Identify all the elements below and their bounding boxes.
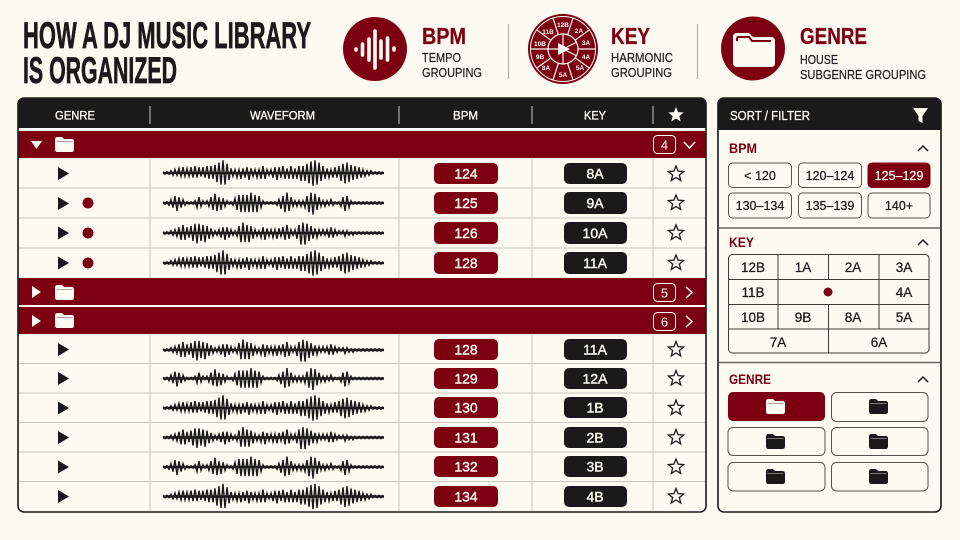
panel: sort / filter [718, 98, 941, 512]
icon: key wheel: 9B [536, 54, 544, 61]
track row 128 11A: 11A [583, 255, 608, 271]
track row 128 11A lower: 11A [583, 342, 608, 358]
table header: BPM [453, 108, 478, 122]
icon: key wheel: 4A [582, 54, 590, 61]
track row 128 11A lower: 128 [454, 342, 478, 358]
icon: folder circle [721, 16, 785, 80]
table header: GENRE [55, 108, 95, 122]
track row 124 8A: 8A [586, 166, 604, 182]
legend text: GENRE: GENRE [800, 23, 867, 49]
legend separator [696, 24, 698, 79]
filter section: KEY: 11B [741, 285, 765, 300]
track row 128 11A lower [58, 339, 684, 362]
icon: funnel [913, 108, 928, 123]
icon: key wheel [528, 14, 598, 84]
table header: WAVEFORM [250, 108, 315, 122]
track row 132 3B [58, 456, 684, 478]
icon: key wheel: 10B [534, 41, 546, 48]
filter section: BPM: 135–139 [806, 199, 854, 213]
filter section: BPM [728, 140, 930, 218]
track row 134 4B: 134 [454, 488, 478, 504]
track row 132 3B: 132 [454, 458, 478, 474]
title [23, 15, 311, 91]
track row 134 4B [58, 484, 684, 509]
icon: key wheel: 2A [575, 28, 583, 35]
filter section: BPM: 120–124 [806, 169, 854, 183]
genre group row 5 [18, 278, 706, 305]
icon: key wheel: 12B [557, 22, 569, 29]
track row 128 11A [58, 250, 684, 276]
filter section: KEY: 3A [896, 260, 912, 275]
track row 126 10A: 126 [454, 225, 478, 241]
legend text: GENRE: SUBGENRE GROUPING [800, 68, 926, 82]
filter section: KEY: KEY [729, 234, 755, 250]
track row 126 10A: 10A [583, 225, 608, 241]
title: HOW A DJ MUSIC LIBRARY [23, 15, 311, 56]
legend text: BPM: BPM [422, 23, 466, 49]
filter header: SORT / FILTER [730, 108, 810, 123]
legend text: KEY: GROUPING [611, 66, 672, 80]
table column lines [19, 158, 705, 512]
track row 134 4B: 4B [586, 488, 604, 504]
filter section: BPM: 125–129 [875, 169, 923, 183]
track row 131 2B: 131 [454, 430, 478, 446]
filter section: KEY: 10B [741, 310, 765, 325]
legend text: GENRE [800, 23, 926, 82]
icon: key wheel: 5A [576, 65, 584, 72]
legend separator [508, 24, 510, 79]
genre group row 5: 5 [661, 286, 668, 300]
filter section: KEY [728, 234, 929, 353]
title: IS ORGANIZED [23, 50, 177, 91]
legend: GENRE [721, 16, 926, 82]
filter section: KEY: 1A [795, 260, 811, 275]
table header: KEY [584, 108, 606, 122]
track row 125 9A: 125 [454, 195, 478, 211]
track row 129 12A: 129 [454, 370, 478, 386]
genre group row 6 [18, 307, 706, 334]
filter section: KEY: 5A [896, 310, 912, 325]
genre group row 4: 4 [661, 138, 668, 152]
legend text: BPM: GROUPING [422, 66, 482, 80]
track row 124 8A [58, 160, 684, 186]
filter section: KEY: 8A [845, 310, 861, 325]
filter section: KEY: 2A [845, 260, 861, 275]
filter section: BPM: 130–134 [736, 199, 784, 213]
track row 125 9A: 9A [586, 195, 604, 211]
table outline [18, 98, 706, 512]
filter section: GENRE [728, 371, 928, 491]
legend text: BPM: TEMPO [422, 51, 461, 65]
filter section: KEY: 9B [795, 310, 811, 325]
filter section: KEY: 4A [896, 285, 912, 300]
genre group row 6: 6 [661, 314, 668, 330]
track row 131 2B: 2B [586, 430, 604, 446]
track row 131 2B [58, 427, 684, 449]
legend text: GENRE: HOUSE [800, 53, 838, 67]
track row 130 1B: 130 [454, 400, 478, 416]
legend: BPM [343, 17, 482, 81]
track row 132 3B: 3B [586, 458, 604, 474]
filter section: BPM: < 120 [744, 169, 776, 183]
panel: track table [18, 98, 706, 512]
track row 130 1B: 1B [586, 400, 604, 416]
track row 124 8A: 124 [454, 166, 478, 182]
icon: key wheel: 8A [542, 65, 550, 72]
track row 128 11A: 128 [454, 255, 478, 271]
filter section: BPM: BPM [729, 140, 757, 156]
legend text: KEY: HARMONIC [611, 51, 673, 65]
genre group row 4 [18, 131, 706, 158]
icon: waveform circle [343, 17, 407, 81]
filter section: BPM: 140+ [885, 199, 913, 213]
track row 129 12A [58, 368, 684, 390]
legend: KEY [528, 14, 673, 84]
icon: key wheel: 3A [582, 40, 590, 47]
icon: key wheel: 5A [559, 72, 567, 79]
legend text: BPM [422, 23, 482, 80]
track row 125 9A [58, 192, 684, 214]
legend text: KEY: KEY [611, 23, 650, 49]
filter section: KEY: 7A [770, 335, 786, 350]
filter section: KEY: 12B [741, 260, 765, 275]
track row 126 10A [58, 222, 684, 244]
icon: key wheel: 11B [542, 29, 554, 36]
filter section: GENRE: GENRE [729, 371, 771, 387]
filter section: KEY: 6A [871, 335, 887, 350]
track row 130 1B [58, 395, 684, 421]
table header [18, 98, 706, 128]
filter header [718, 98, 941, 130]
legend text: KEY [611, 23, 673, 80]
track row 129 12A: 12A [583, 370, 608, 386]
